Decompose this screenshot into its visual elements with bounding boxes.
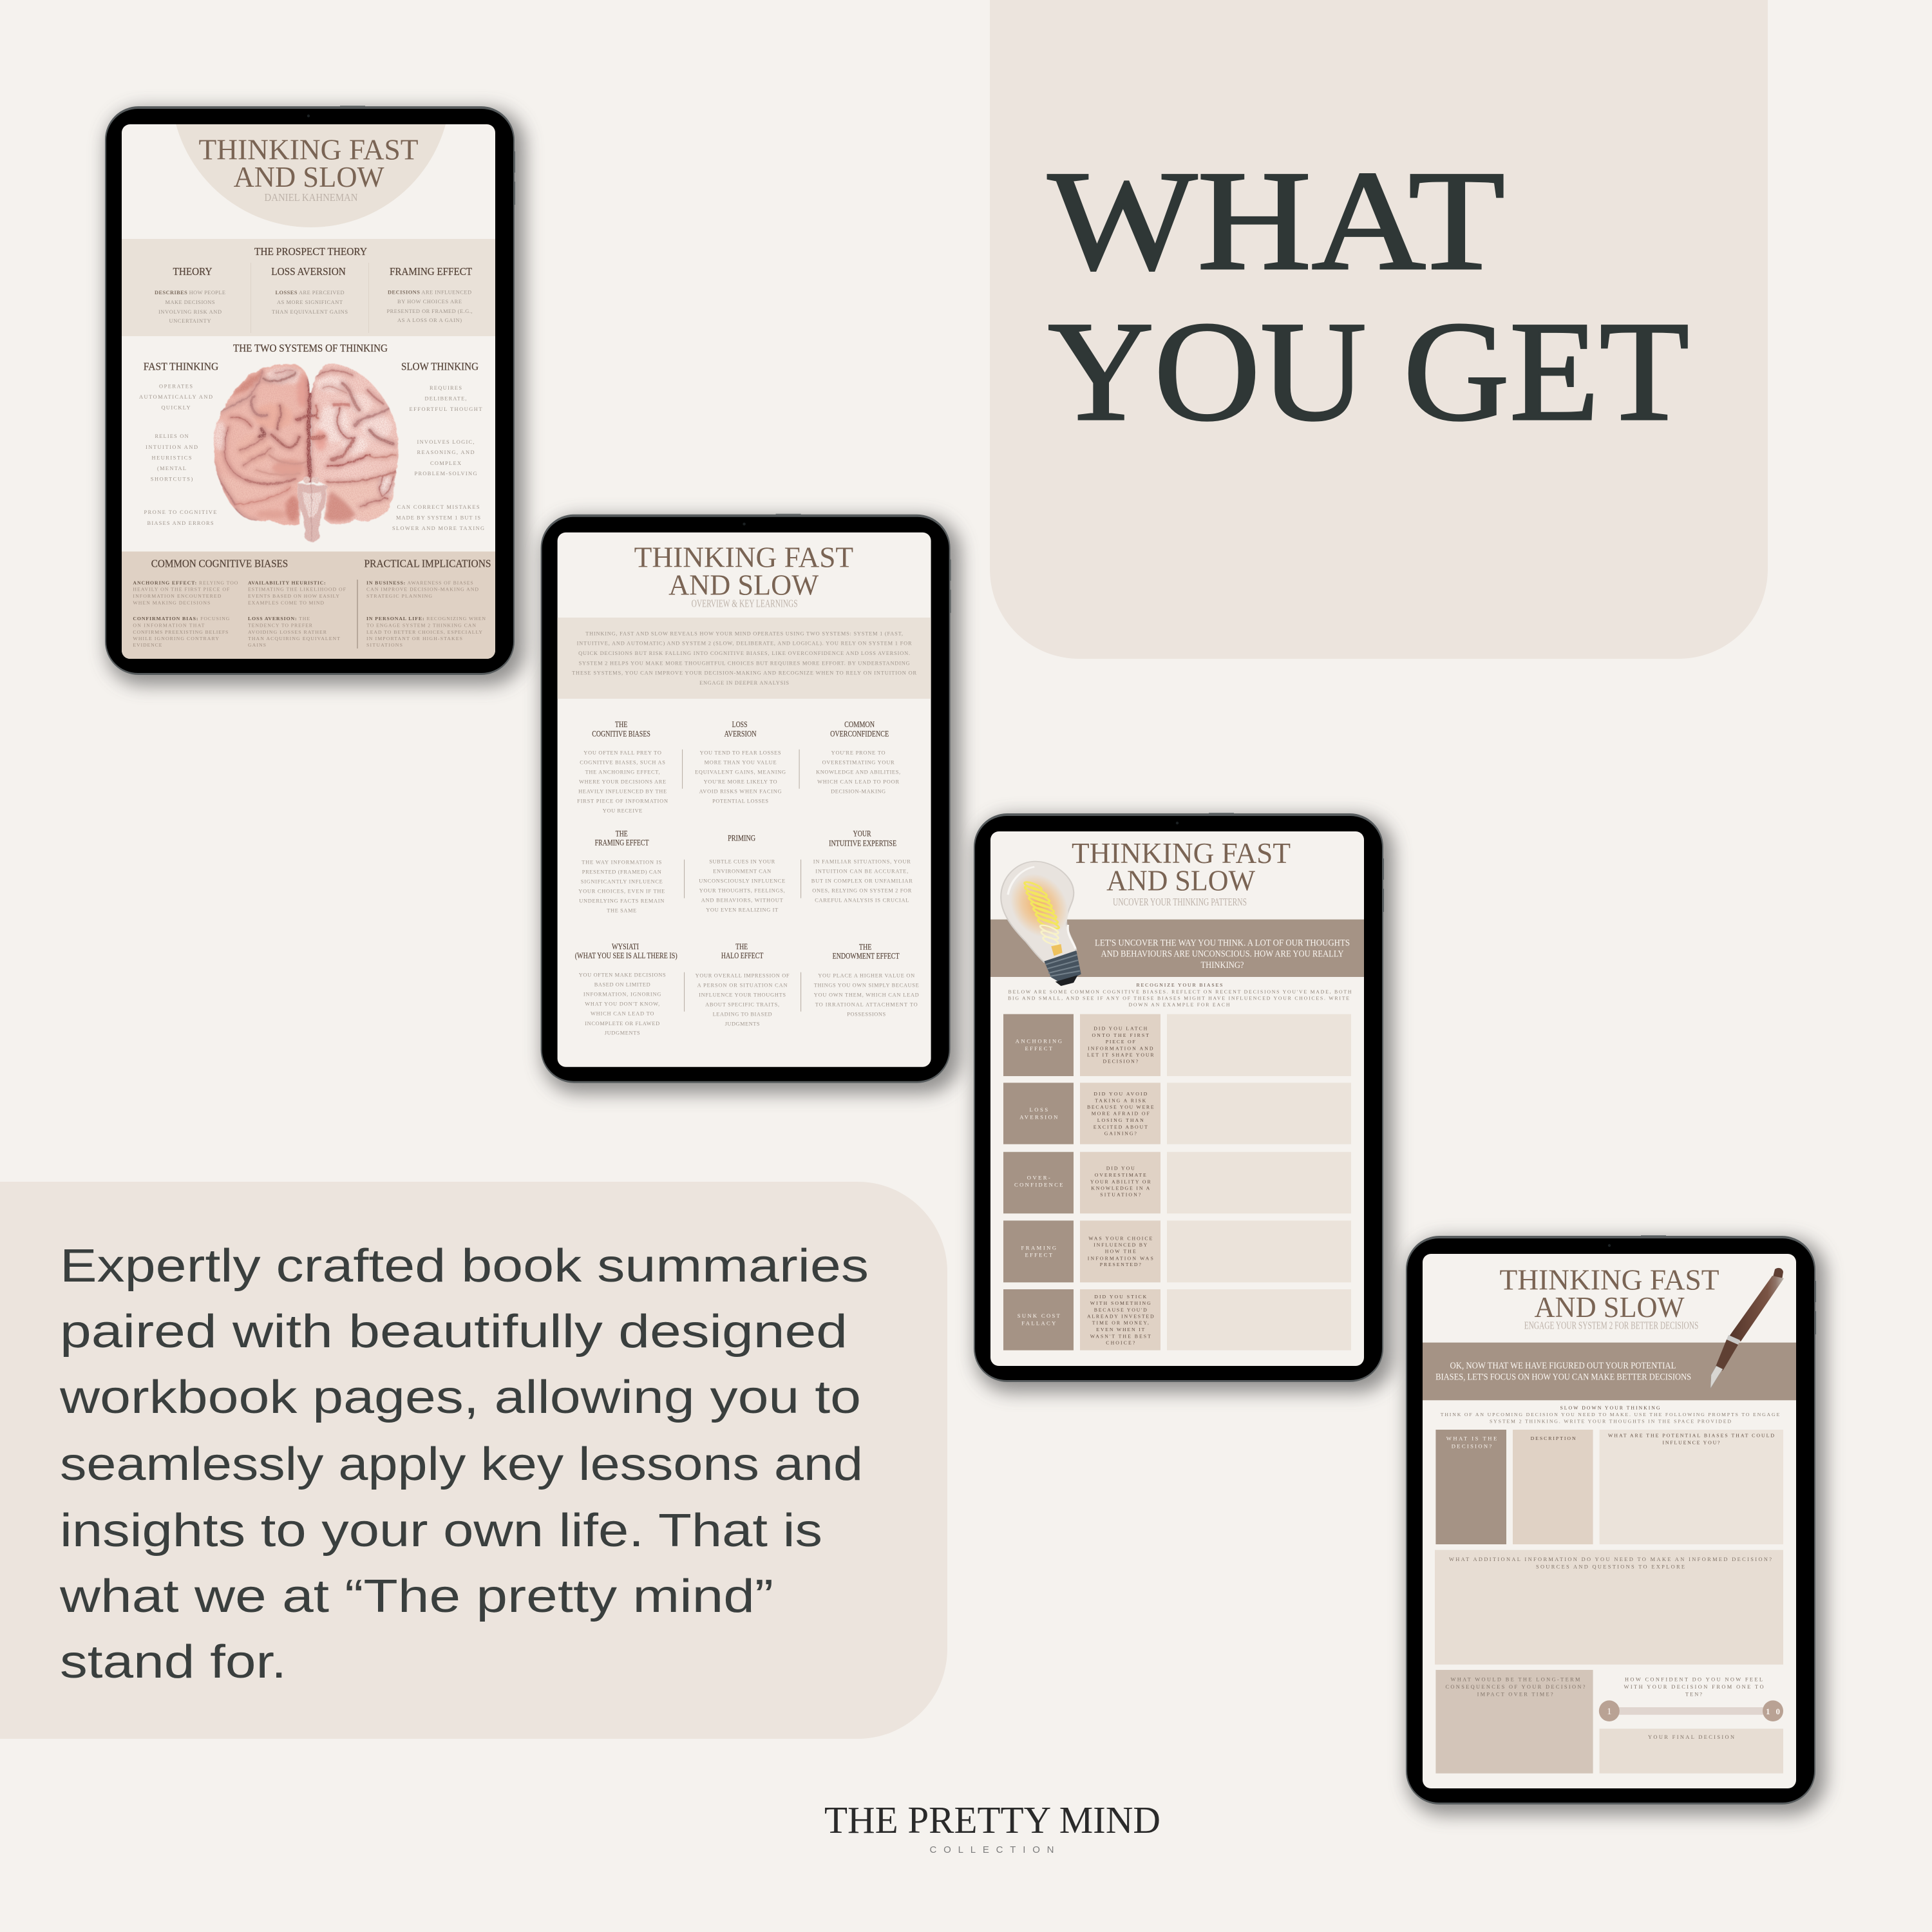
section: prospect theory: MAKE DECISIONS (165, 299, 215, 305)
panel: description background (0, 1182, 947, 1739)
learnings row 1: COGNITIVE BIASES, SUCH AS (580, 760, 665, 766)
table row: sunk cost fallacy: TIME OR MONEY, (1092, 1320, 1149, 1326)
section: two systems of thinking: HEURISTICS (152, 455, 192, 461)
tablet 2: overview and key learnings page (541, 514, 961, 1094)
learnings row 1: POTENTIAL LOSSES (712, 799, 768, 804)
section: two systems of thinking: SLOW THINKING (401, 361, 478, 373)
band: book overview (558, 618, 931, 699)
table row: overconfidence: OVER- (1027, 1174, 1050, 1180)
text block: description: seamlessly apply key lessons and (60, 1439, 863, 1490)
table row: framing effect: WAS YOUR CHOICE (1088, 1235, 1153, 1241)
band: introduction: BIASES, LET'S FOCUS ON HOW YOU CAN MAKE BETTER DECISIONS (1435, 1372, 1691, 1382)
learnings row 3: INFLUENCE YOUR THOUGHTS (699, 992, 786, 998)
learnings row 2: ONES, RELYING ON SYSTEM 2 FOR (812, 888, 912, 894)
learnings row 1: LOSS (732, 720, 748, 729)
icon: fountain pen (1710, 1268, 1784, 1388)
section: biases and implications: PRACTICAL IMPLICATIONS (365, 558, 491, 569)
band: introduction (1423, 1343, 1796, 1400)
section: prospect theory: DESCRIBES HOW PEOPLE (155, 290, 225, 296)
section: prospect theory: PRESENTED OR FRAMED (E.G., (386, 308, 473, 314)
learnings row 3: TO IRRATIONAL ATTACHMENT TO (815, 1001, 918, 1007)
box: long-term consequences: CONSEQUENCES OF YOUR DECISION? (1445, 1684, 1586, 1690)
table row: overconfidence: SITUATION? (1100, 1192, 1141, 1198)
section: biases and implications: LOSS AVERSION: THE (248, 616, 310, 621)
box: final decision (1600, 1728, 1783, 1774)
section: two systems of thinking: AUTOMATICALLY AND (139, 394, 213, 400)
worksheet heading: RECOGNIZE YOUR BIASES (1136, 982, 1222, 988)
section: two systems of thinking: RELIES ON (155, 433, 188, 439)
title: DANIEL KAHNEMAN (264, 191, 358, 204)
section: biases and implications: ON INFORMATION THAT (133, 622, 205, 629)
section: two systems of thinking: (MENTAL (157, 466, 186, 471)
section: biases and implications: GAINS (248, 642, 266, 648)
learnings row 3: BASED ON LIMITED (594, 982, 650, 988)
learnings row 1: MORE THAN YOU VALUE (705, 760, 777, 766)
confidence question: WITH YOUR DECISION FROM ONE TO (1624, 1684, 1763, 1690)
learnings row 2: SUBTLE CUES IN YOUR (709, 858, 775, 864)
worksheet heading (1008, 982, 1352, 1008)
section: two systems of thinking: COMPLEX (430, 460, 461, 466)
logo: the pretty mind collection: THE PRETTY MIND (824, 1799, 1160, 1841)
band: introduction: AND BEHAVIOURS ARE UNCONSCIOUS. HOW ARE YOU REALLY (1101, 949, 1344, 960)
band: book overview: ENGAGE IN DEEPER ANALYSIS (699, 680, 789, 686)
learnings row 3: A PERSON OR SITUATION CAN (697, 982, 788, 988)
section: two systems of thinking: DELIBERATE, (425, 396, 466, 402)
section: biases and implications: EXAMPLES COME TO MIND (248, 600, 324, 605)
learnings row 3: JUDGMENTS (725, 1021, 760, 1027)
band: book overview: THESE SYSTEMS, YOU CAN IMPROVE YOUR DECISION-MAKING AND RECOGNIZE WHEN TO RELY ON INTUITION OR (572, 670, 917, 676)
box: additional information: WHAT ADDITIONAL INFORMATION DO YOU NEED TO MAKE AN INFORMED DECISION? (1449, 1557, 1772, 1562)
section: prospect theory: THEORY (173, 265, 213, 278)
table row: framing effect: EFFECT (1025, 1252, 1053, 1258)
section: biases and implications: IN PERSONAL LIFE: RECOGNIZING WHEN (366, 616, 486, 621)
box: long-term consequences: WHAT WOULD BE THE LONG-TERM (1450, 1676, 1580, 1682)
learnings row 2: YOUR THOUGHTS, FEELINGS, (699, 888, 785, 894)
learnings row 2: CAREFUL ANALYSIS IS CRUCIAL (815, 898, 909, 904)
section: biases and implications: STRATEGIC PLANNING (366, 593, 432, 599)
learnings row 3: JUDGMENTS (605, 1030, 640, 1036)
title: OVERVIEW & KEY LEARNINGS (692, 598, 798, 610)
worksheet heading: SYSTEM 2 THINKING. WRITE YOUR THOUGHTS IN THE SPACE PROVIDED (1490, 1418, 1731, 1424)
learnings row 3: ABOUT SPECIFIC TRAITS, (705, 1001, 779, 1007)
table row: loss aversion (1003, 1083, 1351, 1144)
box: final decision: YOUR FINAL DECISION (1648, 1734, 1734, 1740)
learnings row 1: YOU'RE PRONE TO (831, 750, 886, 756)
table row: loss aversion: BECAUSE YOU WERE (1087, 1104, 1154, 1110)
learnings row 2 (578, 829, 913, 914)
learnings row 3: YOU PLACE A HIGHER VALUE ON (818, 972, 914, 978)
text block: description: workbook pages, allowing you to (59, 1372, 861, 1423)
table row: loss aversion: LOSING THAN (1097, 1117, 1144, 1123)
section: biases and implications: SITUATIONS (366, 642, 402, 648)
section: prospect theory: DECISIONS ARE INFLUENCED (388, 290, 471, 296)
table row: sunk cost fallacy: FALLACY (1021, 1320, 1056, 1327)
title: THINKING FAST (1499, 1264, 1719, 1296)
section: two systems of thinking: EFFORTFUL THOUGHT (410, 406, 482, 412)
learnings row 1: OVERCONFIDENCE (830, 729, 889, 738)
slider: confidence scale: 10 (1766, 1707, 1780, 1716)
table row: overconfidence: CONFIDENCE (1014, 1182, 1063, 1188)
section: prospect theory: LOSS AVERSION (271, 265, 346, 278)
table row: loss aversion: GAINING? (1104, 1131, 1137, 1137)
confidence question (1624, 1676, 1763, 1698)
learnings row 2: THE SAME (607, 908, 636, 914)
slider: confidence scale: 1 (1607, 1707, 1612, 1717)
learnings row 3: YOU OWN THEM, WHICH CAN LEAD (814, 992, 919, 998)
section: two systems of thinking: QUICKLY (161, 405, 191, 411)
title (1072, 837, 1291, 908)
section: biases and implications: HEAVILY ON THE FIRST PIECE OF (133, 587, 230, 592)
box: potential biases: WHAT ARE THE POTENTIAL BIASES THAT COULD (1608, 1433, 1774, 1439)
learnings row 2: YOUR CHOICES, EVEN IF THE (578, 889, 665, 895)
learnings row 1: AVERSION (724, 729, 757, 738)
title: THINKING FAST (1072, 837, 1291, 869)
band: introduction: THINKING? (1200, 960, 1244, 971)
table row: loss aversion: LOSS (1029, 1106, 1048, 1113)
table row: anchoring effect: EFFECT (1025, 1045, 1053, 1052)
learnings row 2: INTUITION CAN BE ACCURATE, (815, 868, 908, 874)
box: potential biases (1600, 1430, 1783, 1544)
section: biases and implications: AVOIDING LOSSES RATHER (248, 629, 327, 635)
learnings row 1: OVERESTIMATING YOUR (822, 760, 895, 766)
section: biases and implications: EVIDENCE (133, 642, 162, 648)
table row: loss aversion: TAKING A RISK (1095, 1097, 1146, 1103)
band: introduction: LET'S UNCOVER THE WAY YOU THINK. A LOT OF OUR THOUGHTS (1095, 938, 1350, 948)
section: biases and implications: IN BUSINESS: AWARENESS OF BIASES (366, 580, 473, 585)
learnings row 2: THE (616, 829, 628, 838)
text block: description: what we at “The pretty mind” (59, 1571, 773, 1622)
section: two systems of thinking: PRONE TO COGNITIVE (144, 509, 216, 515)
title: THINKING FAST (634, 542, 853, 574)
section: biases and implications: IN IMPORTANT OR HIGH-STAKES (366, 636, 462, 641)
heading: what you get (1048, 142, 1689, 451)
band: biases (122, 551, 495, 659)
table row: framing effect: PRESENTED? (1100, 1262, 1141, 1267)
text block: description: paired with beautifully designed (60, 1306, 848, 1358)
table row: sunk cost fallacy: WASN'T THE BEST (1090, 1333, 1151, 1339)
learnings row 2: THE WAY INFORMATION IS (582, 860, 662, 866)
learnings row 2: SIGNIFICANTLY INFLUENCE (581, 879, 663, 885)
confidence question: HOW CONFIDENT DO YOU NOW FEEL (1625, 1676, 1763, 1682)
table row: sunk cost fallacy: BECAUSE YOU'D (1094, 1307, 1147, 1312)
learnings row 1: HEAVILY INFLUENCED BY THE (578, 789, 667, 795)
section: two systems of thinking (139, 342, 484, 531)
section: biases and implications: ANCHORING EFFECT: RELYING TOO (133, 580, 238, 585)
section: two systems of thinking: BIASES AND ERRORS (147, 520, 214, 526)
learnings row 1: EQUIVALENT GAINS, MEANING (695, 770, 786, 775)
learnings row 3: INFORMATION, IGNORING (583, 992, 661, 998)
table row: loss aversion: EXCITED ABOUT (1094, 1124, 1148, 1130)
illustration: watercolor brain (213, 363, 398, 542)
section: prospect theory: AS MORE SIGNIFICANT (277, 299, 343, 305)
learnings row 1: YOU OFTEN FALL PREY TO (583, 750, 661, 756)
table row: anchoring effect: DID YOU LATCH (1094, 1026, 1148, 1032)
text block: description (59, 1240, 869, 1688)
title: AND SLOW (234, 161, 384, 193)
section: two systems of thinking: REASONING, AND (417, 450, 474, 455)
title (634, 542, 853, 610)
learnings row 1: THE ANCHORING EFFECT, (585, 770, 660, 775)
box: long-term consequences (1435, 1670, 1593, 1774)
learnings row 3: INCOMPLETE OR FLAWED (585, 1021, 659, 1027)
table row: anchoring effect: ONTO THE FIRST (1092, 1032, 1149, 1038)
heading: what you get: YOU GET (1048, 292, 1689, 451)
learnings row 3: HALO EFFECT (721, 951, 764, 960)
section: biases and implications: LEAD TO BETTER CHOICES, ESPECIALLY (366, 629, 482, 635)
worksheet heading (1441, 1405, 1779, 1424)
section: two systems of thinking: SLOWER AND MORE TAXING (392, 526, 484, 531)
learnings row 3 (575, 942, 919, 1036)
learnings row 1: YOU TEND TO FEAR LOSSES (700, 750, 781, 756)
slider: confidence scale (1599, 1700, 1783, 1721)
learnings row 3: YOU OFTEN MAKE DECISIONS (579, 972, 666, 978)
table row: framing effect: FRAMING (1021, 1244, 1056, 1251)
box: what is the decision: DECISION? (1452, 1443, 1492, 1450)
panel: what you get heading background (990, 0, 1768, 659)
table row: anchoring effect: PIECE OF (1106, 1039, 1135, 1045)
learnings row 2: ENVIRONMENT CAN (713, 868, 771, 874)
learnings row 1: WHICH CAN LEAD TO POOR (817, 779, 900, 785)
section: two systems of thinking: INVOLVES LOGIC, (417, 439, 474, 445)
table row: framing effect: HOW THE (1105, 1249, 1136, 1255)
learnings row 3: THE (735, 942, 748, 951)
band: book overview: SYSTEM 2 HELPS YOU MAKE MORE THOUGHTFUL CHOICES BUT REQUIRES MORE EFFORT. BY UNDERSTANDING (579, 660, 910, 666)
band: book overview: INTUITIVE, AND AUTOMATIC) AND SYSTEM 2 (SLOW, DELIBERATE, AND LOGICAL). YOU RELY ON SYSTEM 1 FOR (577, 641, 912, 647)
band: prospect theory (122, 239, 495, 336)
section: biases and implications: TENDENCY TO PREFER (248, 622, 313, 629)
learnings row 3: ENDOWMENT EFFECT (833, 952, 900, 961)
text block: description: insights to your own life. That is (60, 1505, 822, 1557)
table row: sunk cost fallacy: SUNK COST (1018, 1312, 1061, 1319)
tablet 4: engage your system 2 page (1406, 1235, 1826, 1815)
learnings row 2: YOUR (853, 829, 871, 838)
tablet 3: uncover your thinking patterns page (974, 813, 1394, 1392)
learnings row 2: UNDERLYING FACTS REMAIN (579, 898, 664, 904)
learnings row 2: YOU EVEN REALIZING IT (706, 907, 778, 913)
table row: framing effect: INFLUENCED BY (1094, 1242, 1148, 1247)
table row: framing effect: INFORMATION WAS (1088, 1255, 1153, 1261)
learnings row 1: DECISION-MAKING (831, 789, 886, 795)
section: two systems of thinking: REQUIRES (430, 385, 462, 391)
section: two systems of thinking: MADE BY SYSTEM 1 BUT IS (396, 515, 480, 520)
box: additional information: SOURCES AND QUESTIONS TO EXPLORE (1536, 1564, 1685, 1570)
title: UNCOVER YOUR THINKING PATTERNS (1113, 896, 1247, 908)
learnings row 2: PRIMING (728, 834, 755, 843)
table row: anchoring effect: DECISION? (1103, 1059, 1139, 1065)
section: two systems of thinking: SHORTCUTS) (151, 477, 193, 482)
section: biases and implications: COMMON COGNITIVE BIASES (151, 558, 288, 569)
tablet 1: book summary page (105, 0, 525, 685)
learnings row 3: WHAT YOU DON'T KNOW, (585, 1001, 659, 1007)
section: biases and implications: CONFIRMS PREEXISTING BELIEFS (133, 629, 228, 635)
learnings row 3: WHICH CAN LEAD TO (591, 1011, 654, 1017)
section: biases and implications: ESTIMATING THE LIKELIHOOD OF (248, 587, 346, 592)
table row: sunk cost fallacy: CHOICE? (1106, 1340, 1135, 1346)
learnings row 3: THE (859, 943, 872, 952)
section: biases and implications: AVAILABILITY HEURISTIC: (248, 580, 326, 585)
heading: what you get: WHAT (1048, 142, 1505, 300)
band: book overview: THINKING, FAST AND SLOW REVEALS HOW YOUR MIND OPERATES USING TWO SYSTEMS: SYSTEM 1 (FAST, (585, 631, 903, 637)
table row: loss aversion: MORE AFRAID OF (1092, 1111, 1150, 1117)
text block: description: stand for. (60, 1636, 287, 1688)
title: ENGAGE YOUR SYSTEM 2 FOR BETTER DECISIONS (1524, 1319, 1698, 1331)
table row: loss aversion: AVERSION (1019, 1113, 1058, 1120)
title (198, 133, 419, 204)
learnings row 3: POSSESSIONS (847, 1011, 886, 1017)
table row: overconfidence: KNOWLEDGE IN A (1091, 1185, 1150, 1191)
learnings row 2: PRESENTED (FRAMED) CAN (582, 869, 661, 875)
section: two systems of thinking: CAN CORRECT MISTAKES (397, 504, 480, 510)
box: description: DESCRIPTION (1531, 1435, 1576, 1441)
learnings row 1: YOU'RE MORE LIKELY TO (704, 779, 777, 785)
box: what is the decision: WHAT IS THE (1446, 1435, 1497, 1442)
learnings row 2: UNCONSCIOUSLY INFLUENCE (699, 878, 785, 884)
learnings row 1: FIRST PIECE OF INFORMATION (577, 799, 668, 804)
box: what is the decision (1435, 1430, 1506, 1544)
table row: sunk cost fallacy: DID YOU STICK (1094, 1294, 1147, 1300)
section: biases and implications (133, 558, 491, 649)
section: biases and implications: CONFIRMATION BIAS: FOCUSING (133, 616, 230, 621)
table row: anchoring effect: INFORMATION AND (1088, 1045, 1153, 1051)
title: AND SLOW (668, 569, 819, 601)
section: biases and implications: WHEN MAKING DECISIONS (133, 600, 210, 605)
confidence question: TEN? (1685, 1692, 1702, 1698)
learnings row 1: KNOWLEDGE AND ABILITIES, (816, 770, 900, 775)
learnings row 1: COGNITIVE BIASES (592, 729, 650, 738)
worksheet heading: BIG AND SMALL, AND SEE IF ANY OF THESE BIASES MIGHT HAVE INFLUENCED YOUR CHOICES. WRITE (1008, 996, 1349, 1001)
band: book overview: QUICK DECISIONS BUT RISK FALLING INTO COGNITIVE BIASES, LIKE OVERCONFIDENCE AND LOSS AVERSION. (578, 650, 910, 656)
learnings row 2: AND BEHAVIORS, WITHOUT (701, 898, 783, 904)
section: biases and implications: THAN ACQUIRING EQUIVALENT (248, 636, 340, 641)
table row: sunk cost fallacy: ALREADY INVESTED (1087, 1314, 1154, 1320)
learnings row 1: WHERE YOUR DECISIONS ARE (579, 779, 666, 785)
section: two systems of thinking: OPERATES (159, 384, 193, 390)
learnings row 2: FRAMING EFFECT (595, 838, 649, 847)
learnings row 1: YOU RECEIVE (603, 808, 642, 814)
section: biases and implications: INFORMATION ENCOUNTERED (133, 593, 222, 599)
section: biases and implications: TO ENGAGE SYSTEM 2 THINKING CAN (366, 622, 476, 629)
title: THINKING FAST (198, 133, 419, 166)
table row: sunk cost fallacy (1003, 1289, 1351, 1350)
logo: the pretty mind collection: COLLECTION (930, 1844, 1054, 1855)
title: AND SLOW (1534, 1291, 1685, 1323)
icon: light bulb (1001, 862, 1081, 986)
section: prospect theory: UNCERTAINTY (169, 318, 211, 324)
section: biases and implications: EVENTS BASED ON HOW EASILY (248, 593, 339, 599)
table row: framing effect (1003, 1220, 1351, 1282)
section: prospect theory: FRAMING EFFECT (390, 265, 473, 278)
box: additional information (1435, 1550, 1783, 1665)
section: two systems of thinking: PROBLEM-SOLVING (415, 471, 477, 477)
section: two systems of thinking: THE TWO SYSTEMS OF THINKING (233, 342, 388, 354)
section: biases and implications: CAN IMPROVE DECISION-MAKING AND (366, 587, 478, 592)
section: prospect theory: THE PROSPECT THEORY (254, 245, 367, 258)
worksheet heading: SLOW DOWN YOUR THINKING (1560, 1405, 1660, 1411)
learnings row 2: IN FAMILIAR SITUATIONS, YOUR (813, 858, 911, 864)
table row: overconfidence: OVERESTIMATE (1095, 1172, 1146, 1178)
learnings row 3: YOUR OVERALL IMPRESSION OF (696, 972, 790, 978)
text block: description: Expertly crafted book summaries (60, 1240, 869, 1292)
table row: anchoring effect: LET IT SHAPE YOUR (1087, 1052, 1154, 1058)
learnings row 3: LEADING TO BIASED (713, 1011, 772, 1017)
title: AND SLOW (1106, 865, 1256, 897)
worksheet heading: THINK OF AN UPCOMING DECISION YOU NEED TO MAKE. USE THE FOLLOWING PROMPTS TO ENGAGE (1441, 1412, 1779, 1417)
worksheet heading: DOWN AN EXAMPLE FOR EACH (1128, 1002, 1230, 1008)
title (1499, 1264, 1719, 1331)
table row: overconfidence: DID YOU (1106, 1165, 1135, 1171)
table row: loss aversion: DID YOU AVOID (1094, 1091, 1148, 1097)
title arc (176, 124, 446, 227)
section: two systems of thinking: INTUITION AND (146, 444, 198, 450)
section: prospect theory: INVOLVING RISK AND (158, 309, 222, 315)
learnings row 1 (577, 720, 900, 814)
learnings row 1: COMMON (844, 720, 875, 729)
table row: sunk cost fallacy: EVEN WHEN IT (1096, 1327, 1145, 1332)
band: introduction (990, 920, 1364, 977)
section: biases and implications: WHILE IGNORING CONTRARY (133, 636, 219, 641)
learnings row 3: THINGS YOU OWN SIMPLY BECAUSE (814, 982, 919, 988)
section: prospect theory: LOSSES ARE PERCEIVED (276, 290, 344, 296)
box: description (1513, 1430, 1593, 1544)
table row: sunk cost fallacy: WITH SOMETHING (1090, 1300, 1151, 1306)
learnings row 3: WYSIATI (612, 942, 639, 951)
section: two systems of thinking: FAST THINKING (144, 361, 218, 373)
table row: overconfidence (1003, 1152, 1351, 1213)
learnings row 2: BUT IN COMPLEX OR UNFAMILIAR (811, 878, 913, 884)
box: long-term consequences: IMPACT OVER TIME? (1477, 1692, 1553, 1698)
box: potential biases: INFLUENCE YOU? (1663, 1439, 1720, 1445)
learnings row 3: (WHAT YOU SEE IS ALL THERE IS) (575, 951, 677, 960)
learnings row 1: AVOID RISKS WHEN FACING (699, 789, 782, 795)
learnings row 2: INTUITIVE EXPERTISE (829, 838, 896, 848)
section: prospect theory: THAN EQUIVALENT GAINS (272, 309, 348, 315)
section: prospect theory: AS A LOSS OR A GAIN) (397, 317, 462, 323)
section: prospect theory: BY HOW CHOICES ARE (397, 299, 462, 305)
section: prospect theory (155, 245, 473, 333)
table row: anchoring effect (1003, 1014, 1351, 1076)
table row: overconfidence: YOUR ABILITY OR (1090, 1179, 1151, 1184)
learnings row 1: THE (615, 720, 628, 729)
band: introduction: OK, NOW THAT WE HAVE FIGURED OUT YOUR POTENTIAL (1450, 1361, 1676, 1371)
worksheet heading: BELOW ARE SOME COMMON COGNITIVE BIASES. REFLECT ON RECENT DECISIONS YOU'VE MADE, BOTH (1009, 989, 1352, 995)
table row: anchoring effect: ANCHORING (1016, 1037, 1062, 1044)
